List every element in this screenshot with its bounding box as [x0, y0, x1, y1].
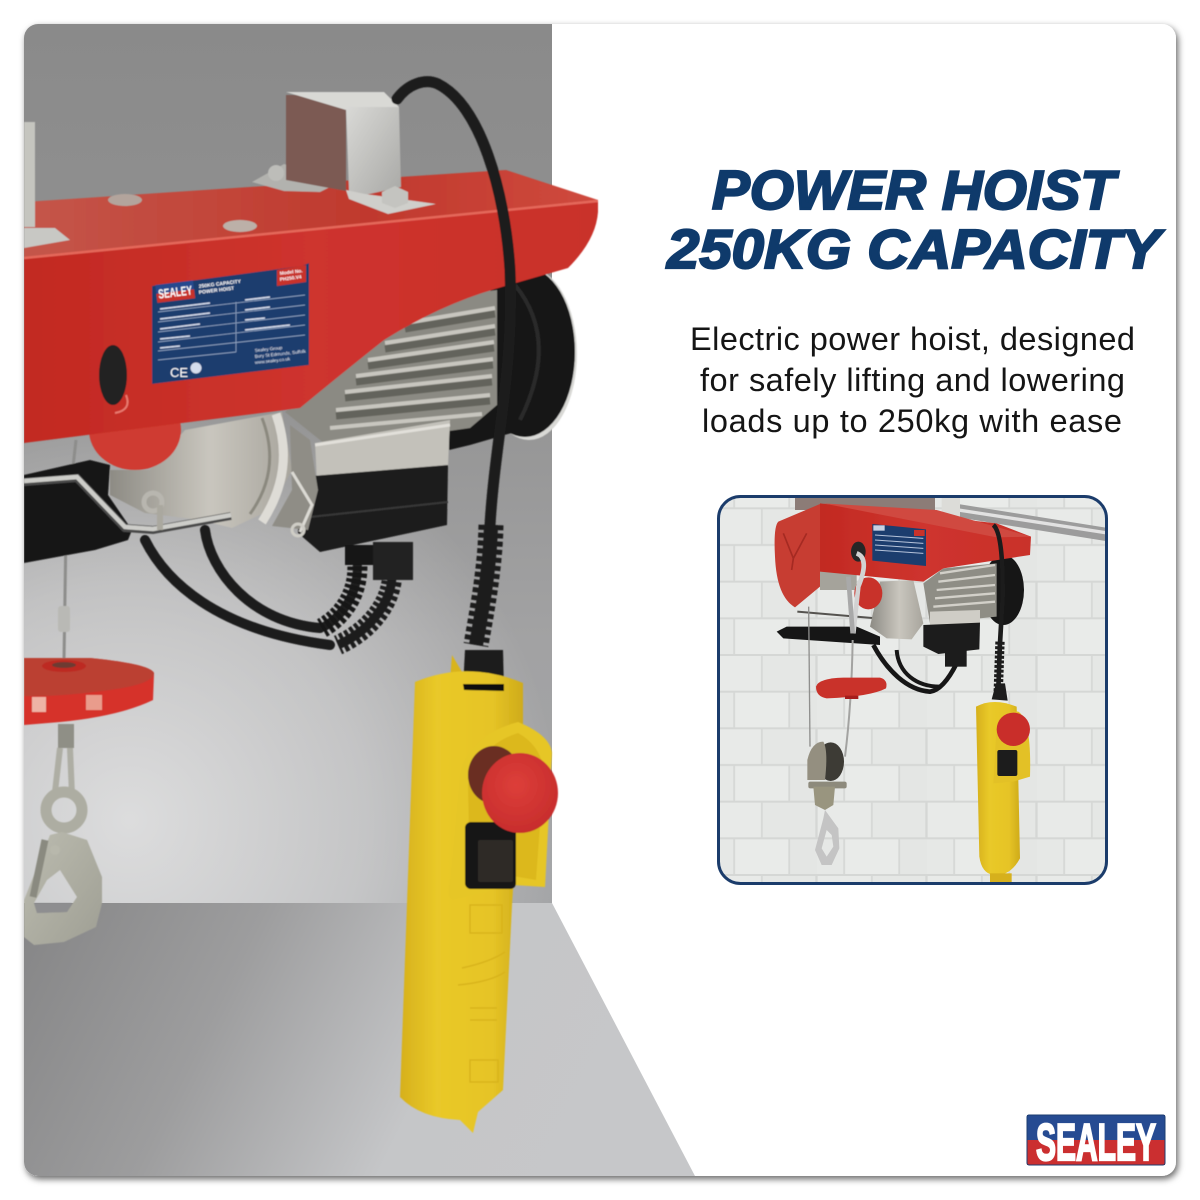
button hood [500, 722, 553, 888]
studio wall [24, 24, 552, 904]
mounting bracket [252, 92, 436, 214]
control pendant [976, 683, 1030, 890]
hook loop [853, 553, 864, 633]
left post bolt [24, 122, 70, 248]
model data plate: Sealey Group [255, 345, 283, 353]
hook [815, 810, 839, 865]
brick wall [710, 490, 1110, 890]
hanging tab [450, 654, 462, 673]
terminal box [923, 610, 980, 654]
pendant cable [397, 82, 511, 525]
red stopper disc [816, 678, 887, 699]
cable strain reliefs [322, 542, 413, 645]
drum [820, 570, 857, 590]
pendant body [400, 671, 523, 1133]
lifting wire [58, 440, 76, 660]
inset photo: hoist in use against brick wall [710, 490, 1110, 890]
title: POWER HOIST [712, 159, 1120, 221]
beam [775, 503, 1031, 607]
beam screws [108, 194, 142, 206]
model data plate: CE [170, 365, 188, 380]
beam hole [99, 345, 127, 405]
pendant cable [993, 525, 1003, 643]
model data plate: POWER HOIST [199, 286, 235, 296]
steel rod [797, 612, 877, 618]
rocker switch [465, 822, 516, 889]
wire ropes [809, 607, 810, 747]
model data plate: SEALEY [157, 283, 193, 302]
gearbox [870, 580, 923, 639]
title [666, 159, 1165, 280]
yellow control pendant [400, 655, 558, 1133]
gearbox housing [110, 412, 318, 536]
power cables [145, 530, 330, 645]
studio floor [24, 903, 695, 1176]
inset photo border [718, 496, 1106, 884]
title: 250KG CAPACITY [666, 218, 1165, 280]
red side disc [88, 422, 182, 470]
model data plate: PH250.V4 [280, 274, 302, 283]
red disc [854, 577, 882, 609]
support bar [795, 497, 1110, 542]
pendant cable strain relief [463, 525, 504, 690]
terminal box [298, 420, 450, 552]
description text: Electric power hoist, designed [690, 321, 1135, 357]
model data plate: Model No. [280, 268, 303, 277]
model data plate: www.sealey.co.uk [255, 356, 291, 365]
pulley block [807, 742, 847, 810]
data plate [872, 524, 926, 566]
hoist illustration [24, 82, 598, 1133]
black end cap [449, 267, 577, 450]
model data plate: 250KG CAPACITY [199, 279, 242, 290]
moulded markings [458, 905, 505, 1082]
motor [923, 563, 997, 623]
emergency stop button [468, 746, 512, 802]
black end cap [989, 558, 1024, 625]
power cables [873, 645, 957, 692]
description text: loads up to 250kg with ease [702, 403, 1122, 439]
description text: for safely lifting and lowering [700, 362, 1125, 398]
black arm [777, 627, 880, 645]
model data plate: Bury St Edmunds, Suffolk [255, 349, 307, 359]
motor with cooling fins [285, 290, 497, 448]
panel: product photo [24, 24, 695, 1176]
red beam [24, 170, 598, 443]
description text [690, 321, 1135, 439]
rear black arm [24, 460, 132, 563]
lifting hook [24, 724, 102, 945]
red wire stopper disc [24, 658, 154, 725]
model data plate [152, 263, 309, 384]
steel rod and catch [24, 477, 231, 530]
